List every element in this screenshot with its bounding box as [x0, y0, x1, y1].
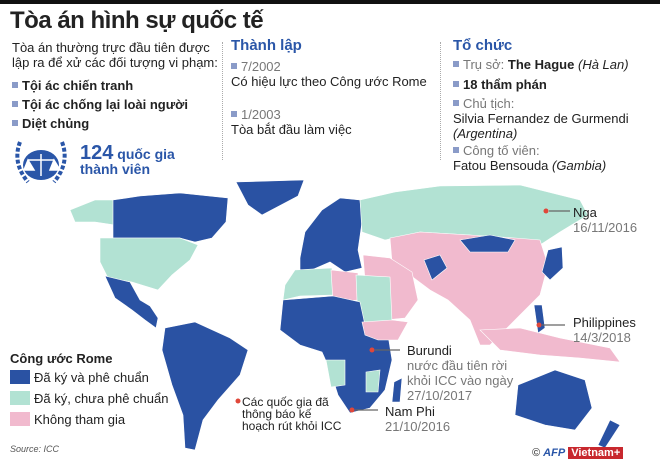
callout: withdrawal note: Các quốc gia đã	[242, 395, 329, 409]
middle east	[363, 255, 418, 320]
logos: © AFP Vietnam+	[532, 447, 620, 459]
panel: organization: (Argentina)	[453, 126, 517, 141]
stat: member states	[80, 142, 175, 177]
panel: founding: Tòa bắt đầu làm việc	[231, 122, 352, 137]
horn pink	[362, 320, 408, 340]
panel: organization: 18 thẩm phán	[463, 77, 547, 92]
libya pink	[331, 270, 358, 302]
callout: withdrawal note	[242, 395, 341, 433]
panel: organization	[453, 37, 629, 173]
philippines	[534, 305, 545, 333]
callout: Philippines: 14/3/2018	[573, 330, 631, 345]
callout: Nga	[573, 205, 637, 235]
central asia/china pink	[390, 232, 548, 345]
callout: Nam Phi: 21/10/2016	[385, 419, 450, 434]
NZ	[598, 420, 620, 448]
text block: intro: Diệt chủng	[22, 116, 89, 131]
callout: Nga: Nga	[573, 205, 597, 220]
callout: withdrawal note: thông báo kế	[242, 407, 311, 421]
callout: Philippines	[573, 315, 636, 345]
legend: Đã ký và phê chuẩn	[34, 370, 149, 385]
callout: Burundi	[407, 343, 514, 403]
south america	[162, 322, 248, 450]
north africa mint	[283, 268, 333, 300]
callout: Nam Phi	[385, 404, 450, 434]
icon: ICC scales	[15, 141, 67, 184]
panel: founding: 1/2003	[241, 107, 281, 122]
angola mint	[326, 360, 345, 387]
alaska	[70, 200, 115, 225]
russia	[360, 185, 588, 245]
callout: Nga: 16/11/2016	[573, 220, 637, 235]
callout: Burundi: 27/10/2017	[407, 388, 472, 403]
panel: organization: Trụ sở: The Hague (Hà Lan)	[463, 57, 629, 72]
west/central africa blue	[280, 296, 392, 413]
stat: member states: 124 quốc gia	[80, 142, 175, 164]
mexico/central america	[105, 276, 158, 328]
callout: Burundi: Burundi	[407, 343, 452, 358]
legend: Đã ký, chưa phê chuẩn	[34, 391, 168, 406]
legend: Công ước Rome	[10, 351, 112, 366]
legend: Không tham gia	[34, 412, 125, 427]
divider	[222, 42, 223, 160]
panel: organization: Công tố viên:	[463, 143, 540, 158]
source: Source: ICC	[10, 444, 59, 454]
callout: Burundi: khỏi ICC vào ngày	[407, 373, 513, 388]
panel: founding	[231, 37, 427, 137]
panel: organization: Chủ tịch:	[463, 96, 514, 111]
panel: organization: Silvia Fernandez de Gurmendi	[453, 111, 629, 126]
panel: founding: Có hiệu lực theo Công ước Rome	[231, 74, 427, 89]
callout: Nam Phi: Nam Phi	[385, 404, 435, 419]
usa	[100, 238, 198, 290]
text block: intro: Tội ác chống lại loài người	[22, 97, 188, 112]
world map	[70, 180, 620, 450]
text block: intro: Tòa án thường trực đầu tiên được lập ra để xử các đối tượng vi phạm:	[12, 40, 218, 70]
mongolia	[460, 235, 515, 252]
title: Tòa án hình sự quốc tế	[10, 7, 263, 34]
madagascar	[392, 378, 402, 402]
legend	[10, 351, 168, 427]
text block: intro	[12, 40, 218, 131]
panel: organization: Fatou Bensouda (Gambia)	[453, 158, 606, 173]
canada	[113, 193, 228, 242]
panel: organization: Tổ chức	[453, 37, 512, 54]
japan	[542, 247, 563, 280]
europe	[300, 198, 362, 275]
callout: Burundi: nước đầu tiên rời	[407, 358, 507, 373]
panel: founding: Thành lập	[231, 37, 302, 54]
callout: Philippines: Philippines	[573, 315, 636, 330]
greenland	[236, 180, 304, 215]
marker dots	[236, 208, 548, 412]
afghanistan	[424, 255, 447, 280]
stat: member states: thành viên	[80, 161, 150, 177]
top bar	[0, 0, 660, 4]
mozambique mint	[366, 370, 380, 392]
egypt/sudan mint	[356, 275, 392, 325]
text block: intro: Tội ác chiến tranh	[22, 78, 133, 93]
australia	[515, 370, 592, 430]
panel: founding: 7/2002	[241, 59, 281, 74]
SE asia pink	[480, 328, 620, 362]
callout: withdrawal note: hoạch rút khỏi ICC	[242, 419, 341, 433]
